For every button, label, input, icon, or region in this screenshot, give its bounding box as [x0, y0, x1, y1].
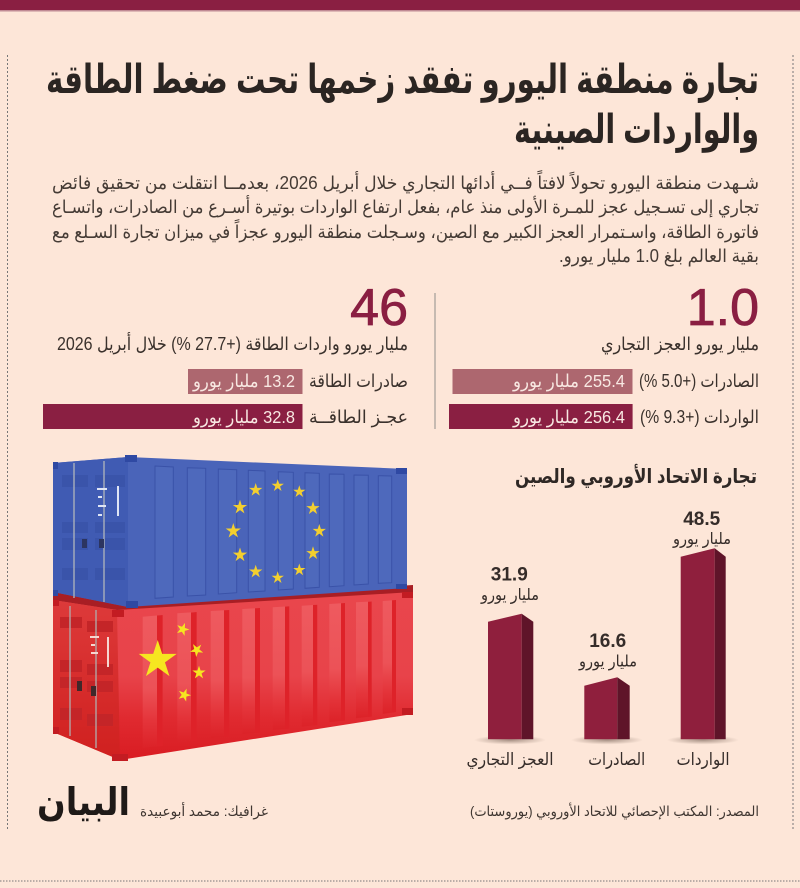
bar chart: EU-China trade	[466, 509, 739, 770]
bar: energy deficit	[43, 404, 302, 429]
intro text block: شـهدت منطقة اليورو تحولاً لافتاً فــي أدائها التجاري خلال أبريل 2026، بعدمــا انتقلت من تحقيق فائض	[52, 170, 759, 194]
bar: exports 16.6: 16.6	[589, 631, 626, 652]
bar: energy exports: 13.2 مليار يورو	[192, 371, 295, 392]
big number: 46: 46	[350, 279, 408, 337]
illustration: stacked containers with EU and China flags	[53, 455, 413, 761]
bar: exports	[452, 369, 632, 394]
label: energy imports: مليار يورو واردات الطاقة (+27.7 %) خلال أبريل 2026	[57, 332, 408, 355]
intro text block: بقية العالم بلغ 1.0 مليار يورو.	[559, 246, 759, 267]
bar: energy deficit: 32.8 مليار يورو	[192, 407, 295, 428]
container: EU flag	[53, 455, 407, 608]
container: China flag	[53, 585, 413, 761]
logo: Al Bayan: البيان	[37, 782, 130, 824]
bar: exports: 255.4 مليار يورو	[512, 371, 625, 392]
bar: deficit 31.9: العجز التجاري	[466, 750, 554, 770]
label: exports: الصادرات (+5.0 %)	[639, 371, 759, 391]
source note: المصدر: المكتب الإحصائي للاتحاد الأوروبي (يوروستات)	[470, 802, 759, 820]
intro text block	[52, 170, 759, 267]
chart title: تجارة الاتحاد الأوروبي والصين	[515, 463, 757, 489]
bar: imports 48.5: 48.5	[683, 509, 721, 530]
title	[46, 58, 759, 153]
intro text block: فاتورة الطاقة، واسـتمرار العجز الكبير مع الصين، وسـجلت منطقة اليورو عجزاً في ميزان تجارة السـلع مع	[52, 219, 759, 243]
bar: imports: 256.4 مليار يورو	[512, 407, 625, 428]
label: imports: الواردات (+9.3 %)	[640, 407, 759, 428]
panel: trade deficit	[449, 279, 759, 429]
bar: imports 48.5: الواردات	[676, 750, 730, 769]
bar: imports 48.5	[667, 509, 739, 769]
bar: deficit 31.9	[466, 565, 554, 770]
label: energy deficit: عجـز الطاقــة	[309, 407, 408, 428]
bar: exports 16.6	[571, 631, 645, 769]
panel: energy imports	[43, 279, 408, 429]
big number: 1.0: 1.0	[687, 279, 759, 337]
label: trade deficit: مليار يورو العجز التجاري	[601, 334, 759, 355]
China stars	[139, 621, 206, 702]
bar: exports 16.6: الصادرات	[588, 750, 645, 769]
bar: exports 16.6: مليار يورو	[578, 654, 637, 672]
label: energy exports: صادرات الطاقة	[309, 371, 408, 391]
bar: imports	[449, 404, 633, 429]
bar: imports 48.5: مليار يورو	[672, 531, 731, 549]
EU stars	[226, 479, 326, 583]
bar: deficit 31.9: 31.9	[491, 565, 528, 586]
bar: deficit 31.9: مليار يورو	[480, 587, 539, 605]
graphic credit: غرافيك: محمد أبوعبيدة	[140, 802, 268, 820]
